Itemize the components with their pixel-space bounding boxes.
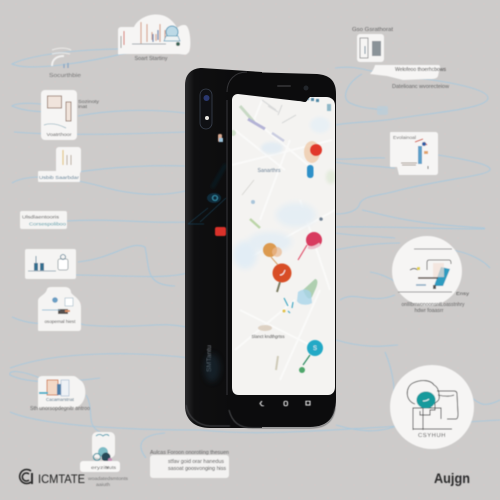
map pin: orange: [263, 243, 282, 265]
logo: icmtate: [20, 470, 85, 486]
icon: dome: [164, 26, 180, 46]
map park: [282, 279, 317, 313]
icon: workstation: [410, 260, 451, 289]
caption: device card: Sozinoty: [78, 99, 100, 104]
caption: document: Sth unorsopdegnitr antroo: [30, 406, 90, 412]
icon: head outline: [407, 381, 458, 430]
icon: red badge: [215, 227, 226, 236]
icon: small app on back: [218, 134, 223, 142]
label: device card: Voatrthoor: [46, 132, 72, 137]
soft blue node: [377, 106, 388, 115]
label: banner: Welofeoo thoerhcbows: [395, 67, 446, 73]
panel: circles card: Nuts: [105, 465, 117, 471]
label: second line: Corsespoliboo: [29, 222, 66, 228]
status icons: [306, 97, 331, 111]
icon: document: [47, 380, 58, 395]
icon: tubes: [62, 150, 64, 165]
icon: logo mark: [20, 470, 32, 484]
caption: circles: woadatedsmtonts: [88, 476, 129, 482]
panel: label card: [20, 211, 67, 229]
icon: overlapping circles: [94, 447, 112, 462]
label: first line: Ulsdlaentooris: [22, 214, 60, 220]
second line: sasoat goosvonging hiss: [168, 466, 227, 472]
panel: tubes card: [38, 147, 81, 182]
icon: bottles: [34, 263, 38, 271]
label: line right: Ensy: [456, 291, 470, 297]
icon: bag: [58, 259, 68, 270]
icon: front camera: [304, 86, 308, 90]
panel: stack card: [38, 287, 81, 331]
caption: Gso Gsrathorat: [352, 27, 394, 33]
icon: stack: [52, 297, 58, 303]
label: profile circle: CSYHUH: [418, 433, 446, 439]
first line: stfav goid orar hanedus: [168, 459, 225, 465]
caption: banner: Datelioanc wvorecteiow: [392, 84, 449, 90]
icon: devices: [360, 38, 368, 58]
caption: circles: aaiuth: [96, 482, 110, 488]
panel: bottles card: [25, 249, 76, 279]
icon: pin and bar chart: [121, 22, 166, 48]
panel: circle with workstation: [392, 236, 470, 306]
panel: circles card: [80, 432, 120, 472]
label: stack: osopernal hiest: [44, 319, 76, 324]
panel: banner: [370, 65, 446, 80]
map label: lower: Slanct kndthgrtss: [252, 334, 285, 339]
label: rear brand text: SMTantu: [207, 345, 213, 372]
icon: sketch: [44, 124, 66, 128]
wordmark: ICMTATE: [38, 474, 85, 486]
icon: tall bar: [66, 102, 71, 121]
caption: workstation: hdwr foaasrr: [414, 308, 444, 314]
caption: device card second line: inat: [78, 104, 88, 109]
text block: bottom centre: [150, 450, 229, 478]
caption: circles: [88, 476, 129, 488]
icon: blue glow: [188, 164, 226, 224]
caption: workstation: [402, 302, 465, 314]
map pin: red main: [272, 264, 292, 292]
icon: brush: [401, 139, 428, 169]
label: right mid card: Evolainoal: [393, 135, 416, 140]
map pin: teal: S: [313, 346, 317, 352]
map label: upper: Sanarthrs: [258, 168, 281, 174]
nav icons: [260, 401, 310, 406]
phone: rear body: [185, 68, 262, 428]
map pin: teal: [276, 340, 323, 373]
caption: cloud chart: Soart Startiny: [134, 56, 168, 62]
panel: top right thumbnail: [352, 27, 394, 62]
panel: device card: [41, 90, 77, 140]
label: tubes: Usbib Saarbdar: [39, 175, 80, 180]
text block: bottom centre: Aulcas Foroon onorotiing thesuen: [150, 450, 229, 456]
icon: camera module: [200, 89, 212, 129]
label: circles: eryzitr: [91, 465, 110, 471]
logo: aujgn: Aujgn: [434, 471, 470, 486]
icon: wave swoosh: [52, 48, 71, 68]
label: document: Cacamarstnat: [46, 397, 75, 402]
panel: right mid card: [390, 132, 438, 175]
map pin: red top: [304, 141, 322, 178]
icon: teal badge: [416, 392, 436, 408]
icon: earpiece: [277, 85, 291, 87]
caption: workstation: onlIIbrrwonoonsntLoasstnhry: [402, 302, 465, 308]
panel: circle with profile: [390, 365, 474, 449]
caption: swoosh: Socurthbie: [49, 73, 81, 79]
map screen: [230, 90, 337, 396]
phone: front body: [227, 72, 337, 428]
panel: document card: [38, 376, 85, 408]
map pin: pink: [298, 232, 322, 260]
map details: [232, 100, 335, 268]
panel: cloud chart top: [118, 14, 190, 55]
icon: monitor: [48, 96, 62, 108]
